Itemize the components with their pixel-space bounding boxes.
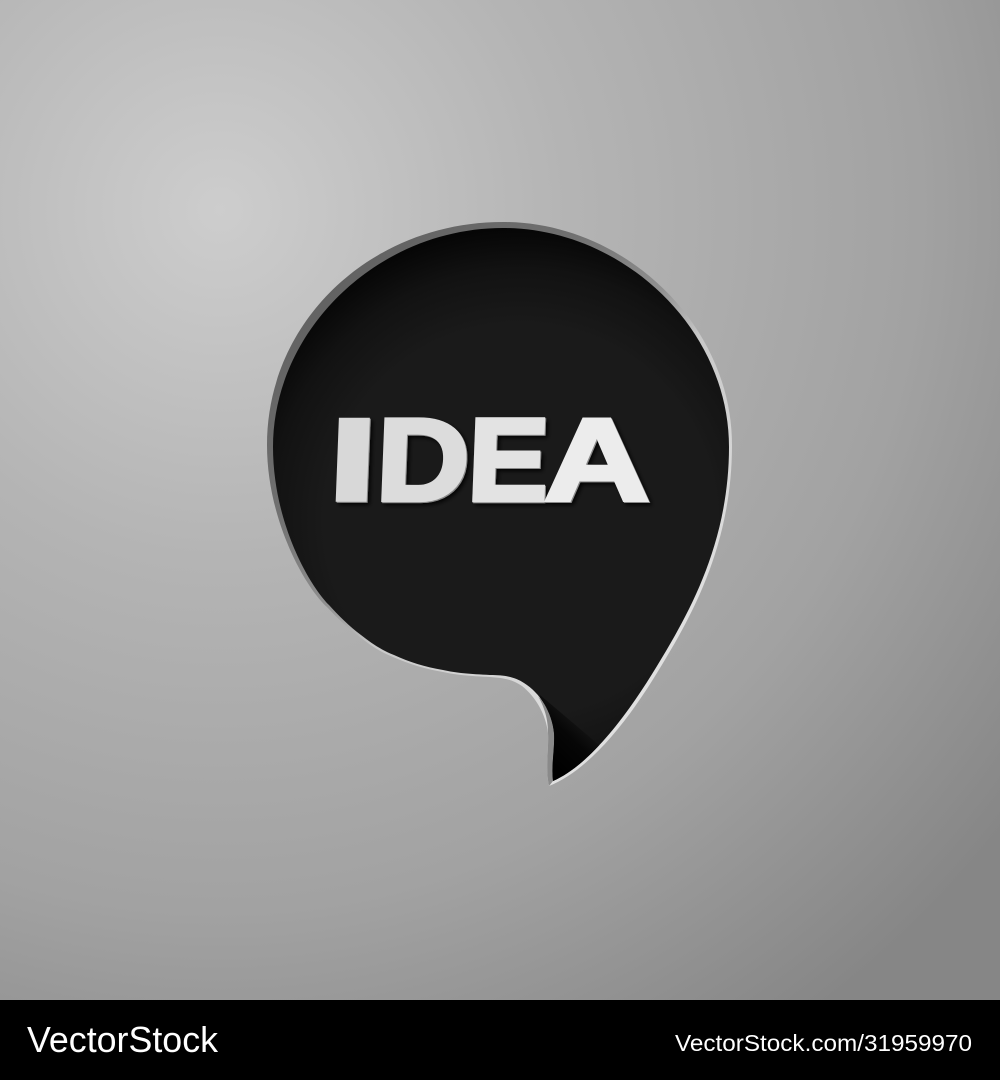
footer logo: VectorStock xyxy=(27,1019,219,1060)
footer image id: VectorStock.com/31959970 xyxy=(675,1030,972,1056)
IDEA heading xyxy=(326,394,650,526)
tail shadow xyxy=(540,696,600,781)
tail left rim xyxy=(538,696,554,786)
letter I: I xyxy=(326,394,380,525)
speech bubble cut-out xyxy=(267,222,732,790)
letter A: A xyxy=(544,395,650,526)
bubble rim xyxy=(267,222,732,786)
letter D: D xyxy=(374,395,472,526)
bubble interior xyxy=(273,228,729,781)
letter E: E xyxy=(466,395,551,526)
footer bar xyxy=(0,1000,1000,1080)
